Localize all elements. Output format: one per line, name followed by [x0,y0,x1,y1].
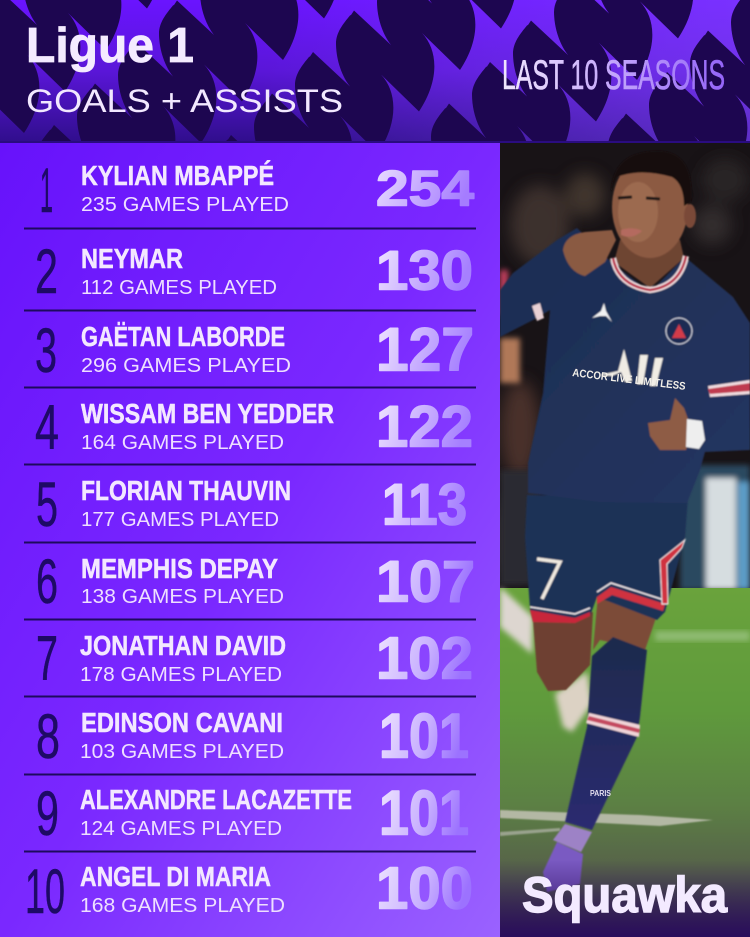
sponsor text: ACCOR LIVE LIMITLESS [572,367,686,393]
row 6: MEMPHIS DEPAY [81,553,278,584]
player figure [500,151,750,892]
row 5: FLORIAN THAUVIN [81,475,291,506]
row 3: 127 [376,316,474,384]
sock stripe [586,713,640,737]
row 1: 254 [376,160,474,216]
row 5 [36,470,467,540]
row 6 [36,547,475,617]
collar red trim [613,256,686,290]
sock logo: PARIS [590,789,612,798]
main leg thigh [593,595,658,650]
row 8: 8 [36,702,60,772]
row 9 [36,778,469,849]
row 8: 101 [379,702,469,772]
row 1 [40,156,474,226]
brand logo: Squawka [522,867,728,923]
row 4: 4 [35,393,59,463]
header band with leaf pattern [0,0,750,142]
wristband [686,419,705,449]
pitch [500,588,750,937]
row 10: 10 [25,857,65,927]
row 7: JONATHAN DAVID [80,630,286,661]
background player's leg and boot [500,587,592,732]
bottom fade [500,860,750,937]
collar [613,256,686,290]
row 5: 177 GAMES PLAYED [81,508,279,531]
row 10: ANGEL DI MARIA [80,861,271,892]
row 10: 168 GAMES PLAYED [80,894,285,917]
row 4: 164 GAMES PLAYED [81,431,284,454]
row 2: 2 [35,237,58,307]
head [611,151,696,258]
photo: player celebrating [496,143,750,937]
row 9: 101 [379,778,469,848]
row 6: 138 GAMES PLAYED [81,585,284,608]
row 3: GAËTAN LABORDE [81,321,285,352]
sock [565,637,647,830]
row 7: 7 [36,624,58,694]
row 7: 102 [376,626,473,692]
row 2 [35,237,473,307]
raised hand [563,230,616,276]
row 7 [36,624,473,694]
row 6: 107 [376,550,475,614]
sleeve stripes [532,303,750,397]
neck [614,240,684,288]
crowd background [496,143,750,593]
row 9: ALEXANDRE LACAZETTE [80,784,352,815]
stadium advertising board [500,270,750,590]
row 1: KYLIAN MBAPPÉ [81,160,274,191]
row 8: EDINSON CAVANI [81,707,283,738]
row 1: 235 GAMES PLAYED [81,193,289,216]
sponsor logo [600,349,663,386]
row 2: 112 GAMES PLAYED [81,276,277,299]
row 5: 5 [36,470,58,540]
row 7: 178 GAMES PLAYED [80,663,282,686]
row 3: 3 [35,316,57,386]
row 10: 100 [376,856,473,922]
row 10 [25,856,473,927]
row 6: 6 [36,547,58,617]
subtitle: GOALS + ASSISTS [26,83,343,119]
row 9: 124 GAMES PLAYED [80,817,282,840]
jersey [500,228,750,503]
row 9: 9 [36,779,59,849]
row 3: 296 GAMES PLAYED [81,354,291,377]
lower hand [648,398,692,450]
bent leg [533,612,593,691]
row 4: WISSAM BEN YEDDER [81,398,334,429]
row 4 [35,393,473,463]
club crest [666,318,692,344]
shorts [525,495,688,623]
row 5: 113 [382,472,467,538]
row 2: 130 [376,238,473,302]
ankle and boot [543,824,592,892]
row 8: 103 GAMES PLAYED [80,740,284,763]
jordan logo [592,303,612,322]
row 1: 1 [40,156,53,226]
row 2: NEYMAR [81,243,183,274]
row 3 [35,316,474,386]
row 8 [36,702,469,772]
title: Ligue 1 [26,19,194,73]
row 4: 122 [376,394,473,460]
